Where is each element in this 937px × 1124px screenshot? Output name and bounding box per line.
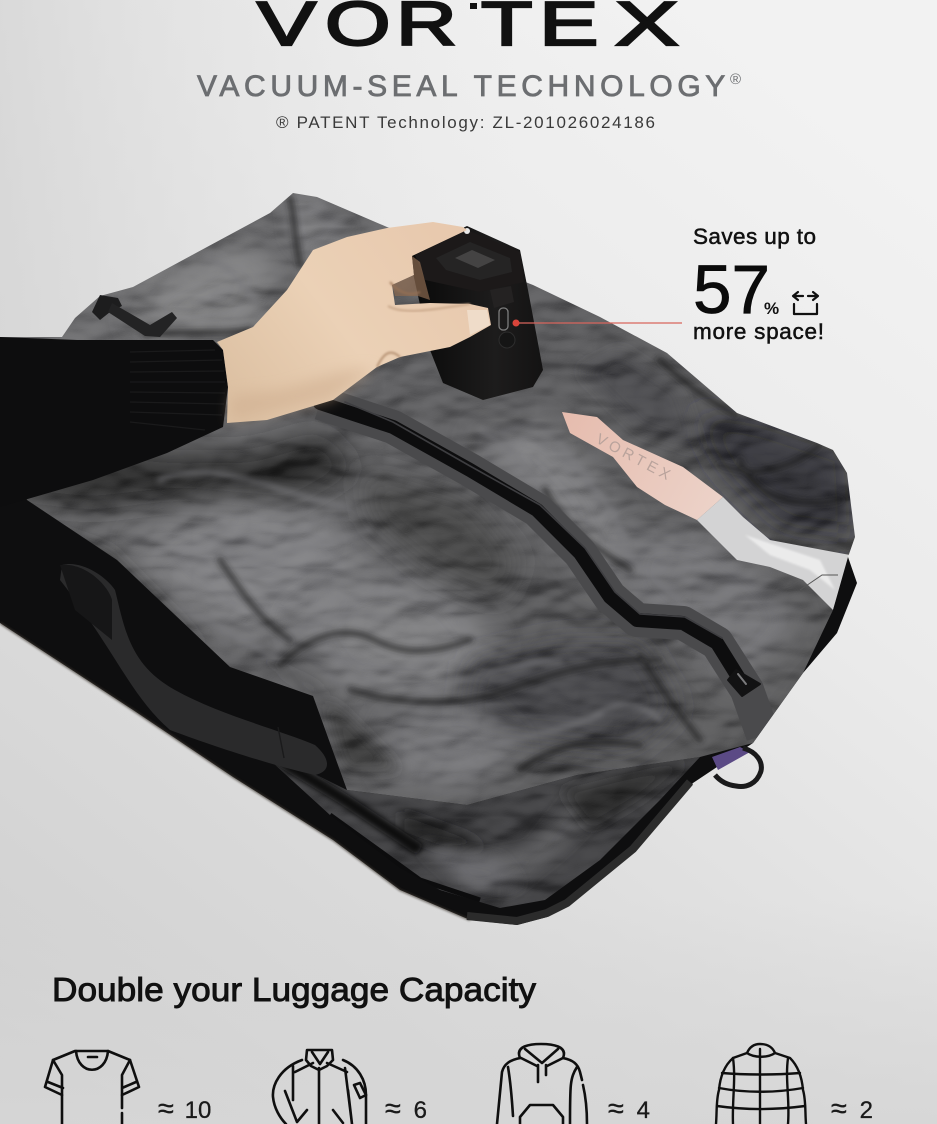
clear window: silver bbox=[697, 497, 850, 610]
callout text bottom: more space! bbox=[693, 319, 824, 344]
icon: expanding box bbox=[793, 292, 818, 314]
subtitle: ® bbox=[730, 71, 741, 88]
clothing capacity row bbox=[45, 1044, 873, 1124]
icon: puffer jacket bbox=[716, 1044, 806, 1124]
zipper seam tape bbox=[320, 403, 763, 735]
icon: hoodie bbox=[497, 1044, 587, 1124]
callout percent: % bbox=[764, 299, 779, 318]
subtitle: VACUUM-SEAL TECHNOLOGY bbox=[197, 70, 725, 103]
photo: compression bag with hand and pump bbox=[0, 190, 860, 925]
panel crease lines bbox=[145, 198, 840, 770]
callout: saves up to 57% more space bbox=[512, 224, 824, 344]
arm: black knit sleeve bbox=[0, 337, 228, 507]
clear window: pink bbox=[562, 412, 723, 520]
callout pointer bbox=[512, 320, 682, 326]
pump: device body bbox=[410, 226, 543, 400]
bag: top panel bbox=[0, 190, 860, 810]
bag: handle strap bbox=[60, 564, 327, 775]
icon: jacket bbox=[273, 1050, 366, 1124]
fabric texture bbox=[0, 190, 860, 810]
icon: t-shirt bbox=[45, 1051, 139, 1124]
bag: purple tab and hanging ring bbox=[712, 747, 761, 786]
hand bbox=[217, 222, 491, 423]
logo: VORTEX bbox=[257, 0, 679, 59]
panel wrinkle shading bbox=[0, 200, 855, 790]
bag: dark base layer bbox=[0, 450, 857, 925]
heading: Double your Luggage Capacity bbox=[52, 971, 537, 1008]
bag: top-left zip pull and buckle bbox=[92, 295, 177, 337]
zipper bbox=[320, 402, 760, 696]
callout number: 57 bbox=[693, 251, 770, 328]
callout text top: Saves up to bbox=[693, 224, 816, 249]
patent line: ® PATENT Technology: ZL-201026024186 bbox=[276, 113, 655, 132]
bag: lower gathered fabric bbox=[276, 757, 700, 908]
window print: faint wordmark: VORTEX bbox=[593, 431, 677, 486]
